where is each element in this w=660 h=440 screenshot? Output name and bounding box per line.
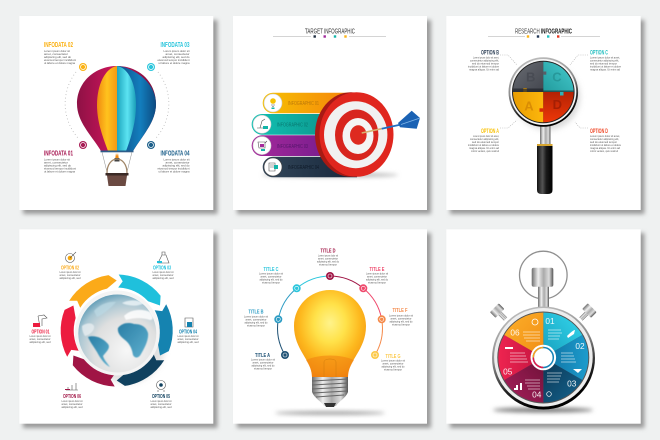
label: infodata 03: ut labore et dolore magna — [158, 61, 190, 65]
label: infodata 03: INFODATA 03 — [160, 42, 190, 49]
title: target infographic: TARGET INFOGRAPHIC — [305, 28, 355, 36]
bar: infographic 04: INFOGRAPHIC 04 — [288, 165, 319, 171]
title C: amet, consectetur — [260, 274, 282, 278]
title A: Lorem ipsum dolor sit — [251, 358, 275, 362]
magnifier lens puzzle — [508, 57, 578, 127]
target board — [315, 92, 394, 177]
option 03: OPTION 03 — [153, 266, 171, 272]
title G — [381, 354, 405, 372]
sector numbers: 03 — [567, 378, 577, 388]
magnifier lens puzzle: D — [553, 97, 562, 112]
dotted orbit around balloon — [65, 72, 169, 138]
light bulb — [294, 290, 366, 407]
title: target infographic — [273, 28, 386, 38]
title F — [389, 308, 413, 326]
label: option A: minim veniam, quis nostrud — [471, 149, 499, 153]
title D: eiusmod tempor — [319, 262, 337, 266]
label: option C: consectetur adipiscing elit, — [590, 58, 619, 62]
label: infodata 03 — [158, 42, 190, 65]
title E: TITLE E — [370, 267, 385, 273]
label: option B — [468, 50, 499, 72]
option 02: OPTION 02 — [61, 266, 79, 272]
label: option D: OPTION D — [590, 129, 608, 135]
option 06: amet, consectetur — [62, 402, 82, 406]
option 01: adipiscing elit, sed — [30, 340, 51, 344]
option 05: Lorem ipsum dolor sit — [150, 399, 172, 403]
option 01: amet, consectetur — [30, 337, 50, 341]
label: option D: minim veniam, quis nostrud — [590, 149, 618, 153]
title C: TITLE C — [264, 267, 279, 273]
title F: amet, consectetur — [390, 316, 412, 320]
label: option C — [590, 50, 621, 72]
arc nodes — [274, 272, 386, 359]
option 06 — [62, 383, 83, 409]
title E — [366, 267, 388, 284]
label: option B: sed do eiusmod tempor — [472, 62, 499, 66]
bar: infographic 02: INFOGRAPHIC 02 — [277, 122, 308, 128]
bar: infographic 03 — [252, 135, 345, 156]
option 05: OPTION 05 — [152, 394, 170, 400]
bulb floor shadow — [275, 411, 385, 415]
title E: adipiscing elit, sed do — [366, 278, 388, 282]
option 03: adipiscing elit, sed — [152, 276, 174, 280]
bar: infographic 01 — [263, 93, 357, 113]
balloon basket — [100, 150, 134, 186]
dart — [362, 111, 420, 133]
label: infodata 01: Lorem ipsum dolor sit — [44, 158, 70, 162]
option 06: adipiscing elit, sed — [62, 405, 83, 409]
label: option C: sed do eiusmod tempor — [590, 62, 617, 66]
option 06: OPTION 06 — [63, 394, 81, 400]
title D: amet, consectetur — [318, 256, 338, 260]
title B: eiusmod tempor — [247, 324, 265, 328]
label: option A: sed do eiusmod tempor — [472, 140, 499, 144]
title A — [251, 353, 275, 370]
label: infodata 02: amet, consectetur — [44, 52, 68, 56]
magnifier shadow — [514, 64, 580, 130]
label: option A: magna aliqua. Ut enim ad — [469, 146, 499, 150]
title C: Lorem ipsum dolor sit — [259, 272, 283, 276]
coloured arc — [278, 276, 382, 355]
label: option B: magna aliqua. Ut enim ad — [469, 68, 499, 72]
magnifier lens puzzle: C — [552, 70, 562, 84]
sector numbers: 02 — [575, 341, 585, 351]
option 05: adipiscing elit, sed — [150, 405, 172, 409]
option 02: amet, consectetur — [60, 273, 80, 277]
label: infodata 02: ut labore et dolore magna — [44, 61, 75, 65]
dashed connectors — [500, 55, 588, 128]
label: infodata 03: Lorem ipsum dolor sit — [164, 49, 190, 53]
panel: research infographic — [446, 16, 641, 210]
title D: Lorem ipsum dolor sit — [318, 254, 338, 258]
title G: adipiscing elit, sed do — [382, 364, 405, 368]
title F: eiusmod tempor — [392, 322, 410, 326]
label: infodata 03: eiusmod tempor incididunt — [158, 58, 190, 62]
title B: amet, consectetur — [246, 318, 266, 322]
node markers — [79, 63, 155, 149]
title G: eiusmod tempor — [384, 368, 402, 372]
label: option D: incididunt ut labore et dolore — [590, 143, 621, 147]
panel: light bulb infographic — [233, 229, 427, 424]
label: infodata 04: eiusmod tempor incididunt — [158, 166, 190, 170]
panel: target infographic — [233, 16, 427, 210]
sector numbers — [503, 316, 585, 399]
title F: Lorem ipsum dolor sit — [389, 314, 413, 318]
label: infodata 02: eiusmod tempor incididunt — [44, 58, 76, 62]
title A: amet, consectetur — [252, 360, 274, 364]
label: infodata 02: INFODATA 02 — [44, 42, 73, 49]
label: infodata 01: eiusmod tempor incididunt — [44, 166, 76, 170]
title E: eiusmod tempor — [368, 280, 386, 284]
option 04: amet, consectetur — [178, 337, 198, 341]
title B: Lorem ipsum dolor sit — [244, 314, 268, 318]
magnifier lens puzzle: A — [524, 98, 534, 114]
label: option C: incididunt ut labore et dolore — [590, 64, 621, 68]
title: research infographic: RESEARCH INFOGRAPHIC — [515, 28, 572, 36]
option 04: OPTION 04 — [179, 330, 198, 336]
title G: amet, consectetur — [382, 362, 404, 366]
bar: infographic 02 — [252, 114, 345, 135]
balloon envelope — [77, 66, 156, 151]
label: infodata 04: amet, consectetur — [166, 160, 190, 164]
stopwatch case — [492, 306, 595, 410]
option 06: Lorem ipsum dolor sit — [62, 399, 83, 403]
option 05: amet, consectetur — [150, 402, 172, 406]
label: option A: incididunt ut labore et dolore — [468, 143, 499, 147]
title B — [244, 310, 268, 328]
title C: eiusmod tempor — [262, 280, 280, 284]
title G: TITLE G — [386, 354, 400, 360]
stopwatch floor shadow — [493, 408, 593, 412]
label: option D: sed do eiusmod tempor — [590, 140, 617, 144]
label: infodata 01: amet, consectetur — [44, 160, 68, 164]
title B: TITLE B — [248, 310, 264, 316]
option 02: adipiscing elit, sed — [60, 276, 81, 280]
title E: amet, consectetur — [367, 274, 387, 278]
sector numbers: 04 — [532, 389, 542, 399]
title F: TITLE F — [392, 308, 408, 314]
label: option C: Lorem ipsum dolor sit amet, — [590, 56, 620, 60]
bar: infographic 01: INFOGRAPHIC 01 — [288, 101, 319, 107]
option 03: Lorem ipsum dolor sit — [152, 270, 174, 274]
stopwatch hub — [530, 345, 556, 370]
sector numbers: 06 — [510, 328, 520, 338]
title A: adipiscing elit, sed do — [252, 364, 275, 368]
label: option B: consectetur adipiscing elit, — [470, 58, 499, 62]
option 04: adipiscing elit, sed — [178, 340, 199, 344]
option 01 — [30, 315, 51, 344]
title A: eiusmod tempor — [254, 366, 272, 370]
label: infodata 04 — [158, 150, 190, 174]
label: infodata 01: adipiscing elit, sed do — [44, 164, 71, 168]
title C: adipiscing elit, sed do — [260, 278, 283, 282]
label: option B: incididunt ut labore et dolore — [468, 64, 499, 68]
option 02: Lorem ipsum dolor sit — [60, 270, 81, 274]
option 01: OPTION 01 — [32, 330, 50, 336]
label: option D: Lorem ipsum dolor sit amet, — [590, 134, 620, 138]
label: option B: Lorem ipsum dolor sit amet, — [473, 56, 499, 60]
globe soft shadow — [89, 307, 165, 383]
label: option A: consectetur adipiscing elit, — [470, 137, 499, 141]
stopwatch sectors — [498, 312, 588, 403]
label: infodata 04: adipiscing elit, sed do — [162, 164, 190, 168]
title B: adipiscing elit, sed do — [244, 320, 268, 324]
label: infodata 01 — [44, 150, 76, 174]
label: infodata 02 — [44, 42, 76, 65]
label: option C: magna aliqua. Ut enim ad — [590, 68, 620, 72]
title F: adipiscing elit, sed do — [390, 320, 413, 324]
title A: TITLE A — [255, 353, 270, 359]
title D: TITLE D — [320, 248, 336, 254]
label: option A: OPTION A — [481, 129, 499, 135]
label: infodata 04: ut labore et dolore magna — [158, 170, 190, 174]
title G: Lorem ipsum dolor sit — [381, 358, 405, 362]
label: infodata 01: INFODATA 01 — [44, 150, 73, 158]
panel: stopwatch infographic — [446, 229, 641, 424]
title C — [259, 267, 283, 284]
globe — [75, 290, 160, 376]
label: option B: OPTION B — [481, 50, 499, 56]
bar: infographic 04 — [263, 157, 357, 177]
label: option D: consectetur adipiscing elit, — [590, 137, 619, 141]
option 04: Lorem ipsum dolor sit — [178, 334, 199, 338]
sector numbers: 05 — [503, 367, 513, 377]
label: infodata 02: adipiscing elit, sed do — [44, 55, 71, 59]
panel: globe infographic — [19, 229, 213, 424]
label: infodata 01: ut labore et dolore magna — [44, 170, 75, 174]
label: option D — [590, 129, 621, 153]
label: infodata 04: Lorem ipsum dolor sit — [164, 158, 190, 162]
title D — [317, 248, 339, 266]
label: option A: Lorem ipsum dolor sit amet, — [473, 134, 499, 138]
label: infodata 02: Lorem ipsum dolor sit — [44, 49, 70, 53]
option 03 — [152, 252, 174, 280]
panel: hot air balloon infographic — [19, 16, 213, 210]
label: infodata 03: amet, consectetur — [166, 52, 190, 56]
title E: Lorem ipsum dolor sit — [366, 272, 388, 276]
label: option A — [468, 129, 499, 153]
sector text lines and icons — [505, 319, 582, 396]
title D: adipiscing elit, sed do — [317, 260, 339, 264]
circular arrows — [46, 264, 187, 397]
magnifier handle — [537, 126, 552, 194]
label: infodata 04: INFODATA 04 — [160, 150, 190, 158]
option 03: amet, consectetur — [152, 273, 174, 277]
label: infodata 03: adipiscing elit, sed do — [162, 55, 190, 59]
stopwatch ring and crown — [520, 251, 567, 308]
option 01: Lorem ipsum dolor sit — [30, 334, 51, 338]
title: research infographic — [488, 28, 600, 38]
floor shadow — [262, 172, 398, 178]
sector numbers: 01 — [545, 316, 555, 326]
stopwatch side buttons — [490, 303, 597, 323]
label: option D: magna aliqua. Ut enim ad — [590, 146, 620, 150]
option 02 — [60, 252, 81, 280]
magnifier lens puzzle: B — [526, 70, 535, 84]
option 04 — [178, 318, 199, 344]
option 05 — [150, 380, 172, 409]
label: option C: OPTION C — [590, 50, 608, 56]
bar: infographic 03: INFOGRAPHIC 03 — [277, 144, 308, 150]
